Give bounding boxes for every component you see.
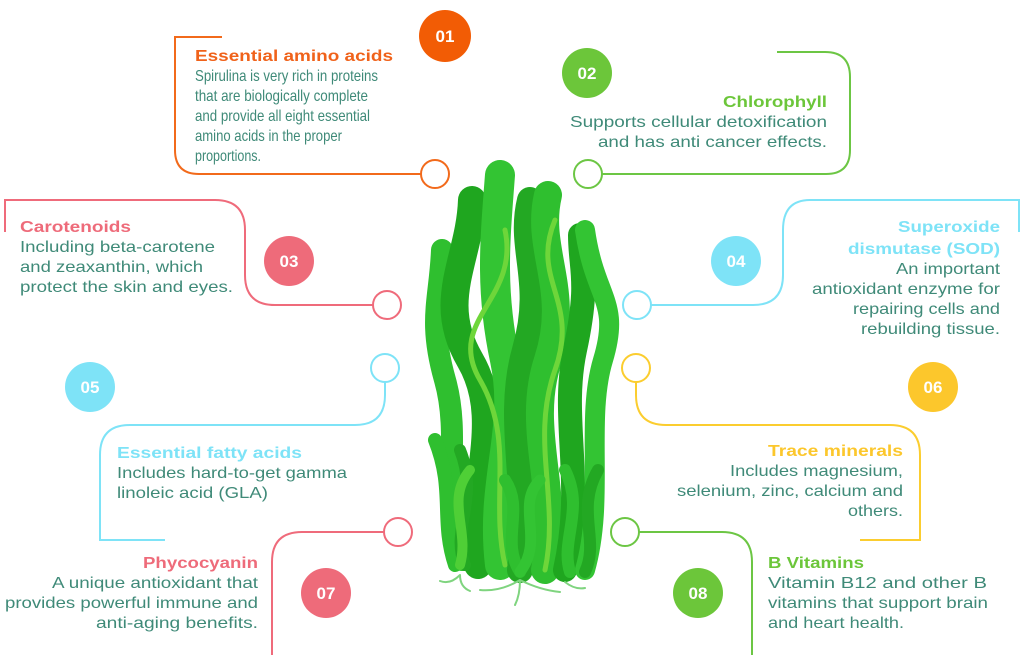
panel: 07 phycocyanin: 07: [317, 584, 335, 603]
panel: 01 essential amino acids: 01: [436, 27, 454, 46]
panel: 07 phycocyanin: A unique antioxidant that: [52, 575, 259, 592]
panel: 07 phycocyanin: Phycocyanin: [143, 555, 258, 572]
panel: 05 essential fatty acids: Essential fatty acids: [117, 445, 302, 462]
panel: 02 chlorophyll: Chlorophyll: [723, 94, 827, 111]
panel: 02 chlorophyll: 02: [578, 64, 596, 83]
panel: 05 essential fatty acids: Includes hard-to-get gamma: [117, 465, 347, 482]
panel: 04 superoxide dismutase: An important: [896, 261, 1001, 278]
panel: 06 trace minerals: Trace minerals: [768, 443, 903, 460]
panel: 05 essential fatty acids: linoleic acid (GLA): [117, 485, 268, 502]
panel: 04 superoxide dismutase: Superoxide: [898, 219, 1000, 236]
panel: 03 carotenoids: 03: [280, 252, 298, 271]
panel: 03 carotenoids: and zeaxanthin, which: [20, 259, 203, 276]
panel: 06 trace minerals: [622, 354, 958, 540]
panel: 08 b vitamins: Vitamin B12 and other B: [768, 575, 987, 592]
panel: 06 trace minerals: 06: [924, 378, 942, 397]
panel: 08 b vitamins: vitamins that support brain: [768, 595, 988, 612]
panel: 01 essential amino acids: [175, 10, 471, 188]
panel: 03 carotenoids: [5, 200, 401, 319]
panel: 04 superoxide dismutase: 04: [727, 252, 746, 271]
panel: 06 trace minerals: Includes magnesium,: [730, 463, 903, 480]
panel: 01 essential amino acids: that are biologically complete: [195, 88, 368, 105]
seaweed illustration: [435, 175, 609, 605]
panel: 03 carotenoids: Carotenoids: [20, 219, 131, 236]
panel: 06 trace minerals: others.: [848, 503, 903, 520]
panel: 07 phycocyanin: [5, 518, 412, 655]
panel: 08 b vitamins: and heart health.: [768, 615, 904, 632]
panel: 02 chlorophyll: [562, 48, 850, 188]
panel: 06 trace minerals: selenium, zinc, calcium and: [677, 483, 903, 500]
panel: 04 superoxide dismutase: dismutase (SOD): [848, 241, 1000, 258]
panel: 05 essential fatty acids: [65, 354, 399, 540]
panel: 08 b vitamins: B Vitamins: [768, 555, 864, 572]
panel: 02 chlorophyll: Supports cellular detoxification: [570, 114, 827, 131]
panel: 05 essential fatty acids: 05: [81, 378, 99, 397]
panel: 07 phycocyanin: provides powerful immune and: [5, 595, 258, 612]
panel: 01 essential amino acids: Essential amino acids: [195, 48, 393, 65]
panel: 03 carotenoids: protect the skin and eyes.: [20, 279, 233, 296]
panel: 08 b vitamins: 08: [689, 584, 707, 603]
panel: 07 phycocyanin: anti-aging benefits.: [96, 615, 258, 632]
panel: 01 essential amino acids: Spirulina is very rich in proteins: [195, 68, 378, 85]
panel: 01 essential amino acids: amino acids in the proper: [195, 128, 343, 145]
panel: 02 chlorophyll: and has anti cancer effects.: [598, 134, 827, 151]
panel: 04 superoxide dismutase: [623, 200, 1019, 338]
panel: 03 carotenoids: Including beta-carotene: [20, 239, 215, 256]
panel: 01 essential amino acids: and provide all eight essential: [195, 108, 370, 125]
panel: 04 superoxide dismutase: repairing cells and: [853, 301, 1000, 318]
panel: 04 superoxide dismutase: antioxidant enzyme for: [812, 281, 1001, 298]
panel: 04 superoxide dismutase: rebuilding tissue.: [861, 321, 1000, 338]
panel: 08 b vitamins: [611, 518, 988, 655]
panel: 01 essential amino acids: proportions.: [195, 148, 261, 165]
